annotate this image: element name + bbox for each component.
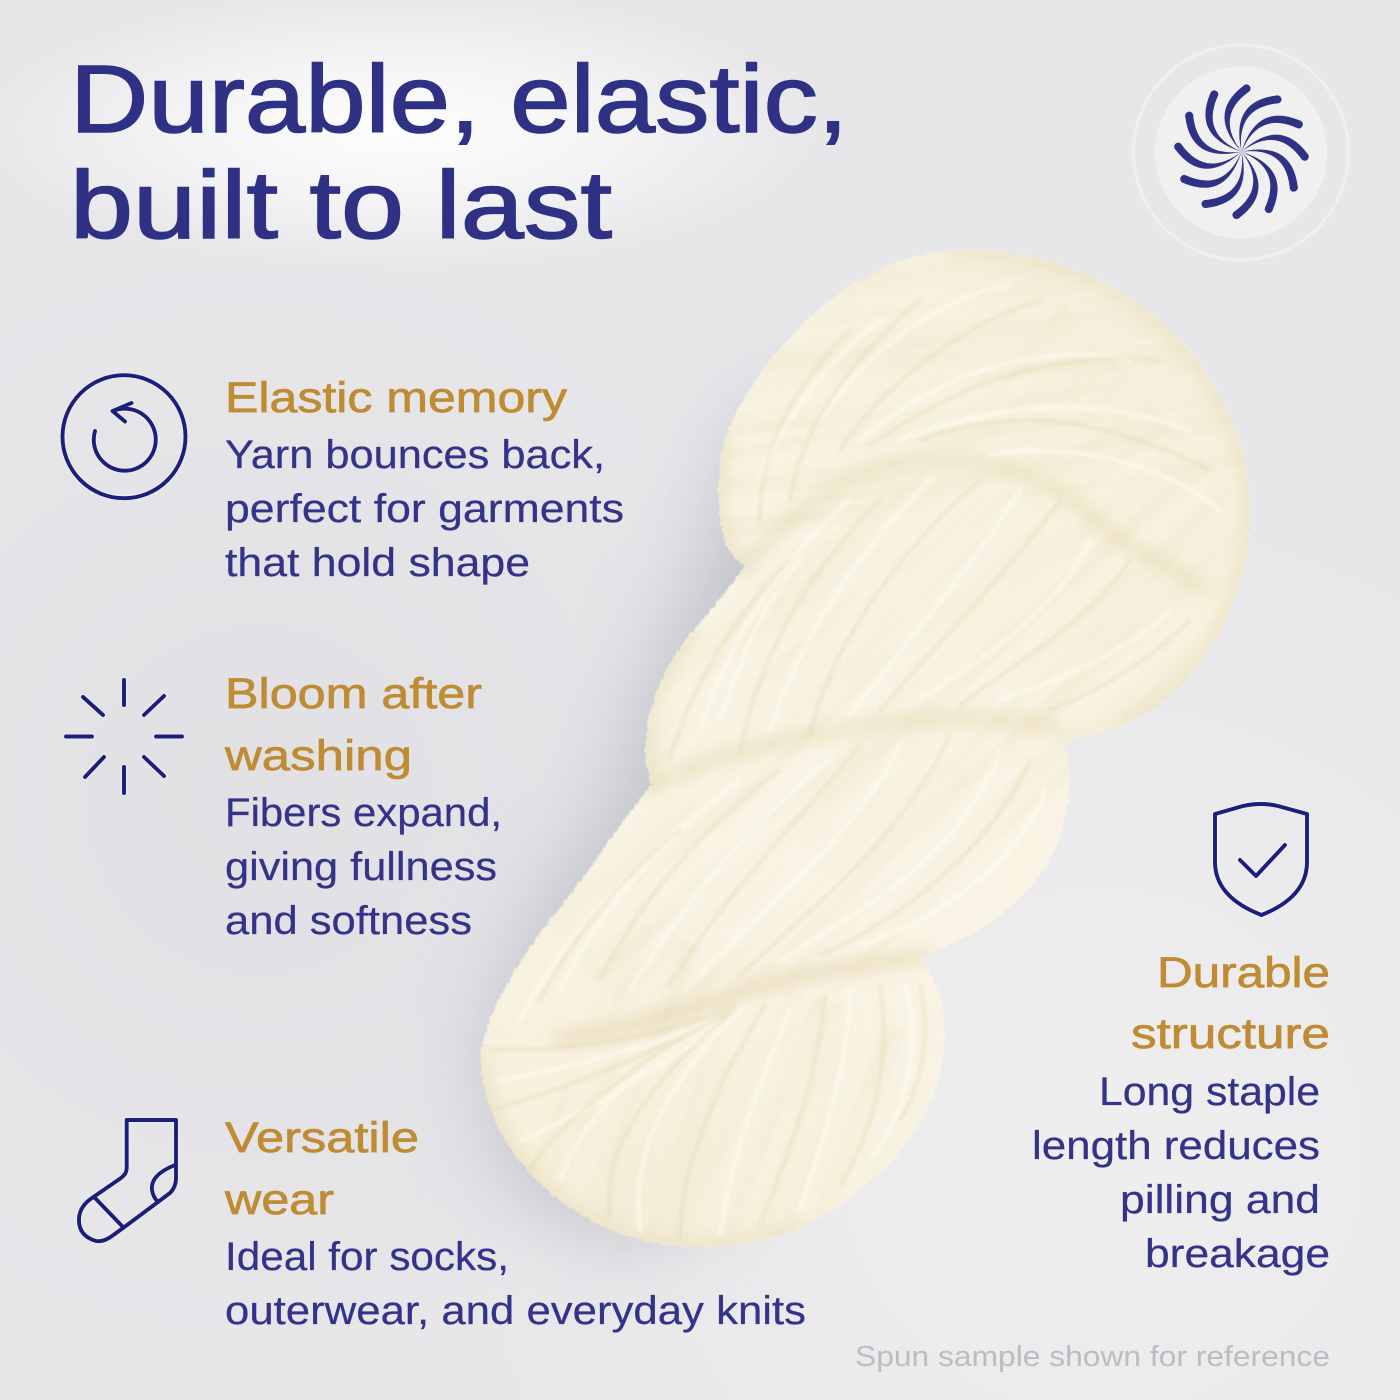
yarn: streak texture twists [630,546,1134,985]
icon: bloom burst [66,680,182,793]
icon: elastic memory circular arrow [62,375,186,498]
feature: versatile wear: Ideal for socks, [225,1235,509,1279]
feature: elastic memory: Elastic memory [225,374,568,422]
yarn: interior shading and strands [469,160,1318,1310]
icon: shield with check [1215,804,1307,915]
title [70,46,848,259]
yarn: strand lines [490,300,1210,1240]
title: built to last [70,152,612,259]
feature: versatile wear: wear [224,1176,334,1224]
footnote: Spun sample shown for reference [855,1341,1330,1373]
yarn: fold shading [560,461,1205,1040]
title: Durable, elastic, [70,46,848,153]
feature: bloom after washing: Fibers expand, [225,791,502,835]
feature: elastic memory [225,374,624,585]
icon: sock [79,1120,176,1241]
yarn: streak texture lower lobe [678,942,894,1071]
feature: durable structure [1032,949,1330,1276]
feature: bloom after washing: Bloom after [225,670,482,718]
feature: versatile wear [224,1114,806,1333]
feature: bloom after washing: giving fullness [225,845,497,889]
feature: elastic memory: perfect for garments [225,487,624,531]
feature: durable structure: length reduces [1032,1124,1320,1168]
feature: versatile wear: outerwear, and everyday knits [225,1289,806,1333]
feature: elastic memory: Yarn bounces back, [225,433,605,477]
yarn cast shadow [480,360,900,1250]
feature: bloom after washing: washing [224,732,412,780]
feature: durable structure: pilling and [1120,1178,1320,1222]
logo badge: spinning swirl [1134,45,1348,260]
yarn skein photo [469,160,1318,1310]
yarn: silhouette [480,250,1250,1247]
feature: durable structure: Durable [1157,949,1330,997]
yarn: streak texture top loop [749,272,1120,528]
yarn: edge shading [480,250,1250,1247]
yarn: highlight strands [500,285,1220,1235]
feature: bloom after washing: and softness [225,899,472,943]
feature: versatile wear: Versatile [225,1114,419,1162]
feature: durable structure: breakage [1145,1232,1330,1276]
feature: bloom after washing [224,670,502,943]
feature: durable structure: Long staple [1099,1070,1320,1114]
feature: durable structure: structure [1131,1010,1330,1058]
feature: elastic memory: that hold shape [225,541,530,585]
